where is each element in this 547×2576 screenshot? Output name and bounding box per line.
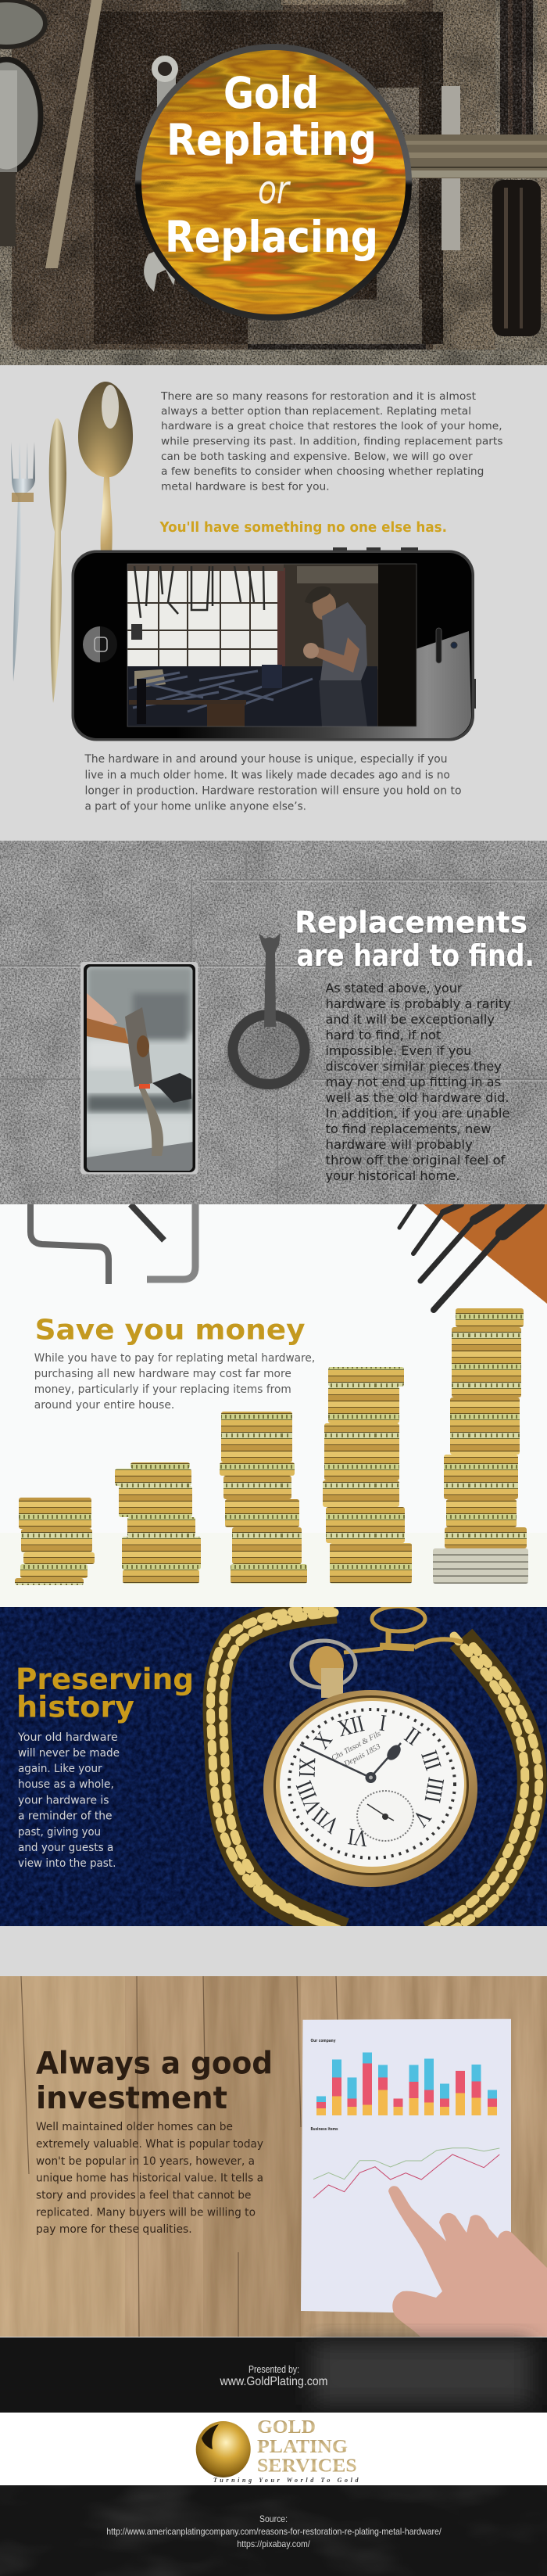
presenter text: Presented by: (248, 2364, 299, 2375)
wooden handle on the right (405, 135, 547, 336)
panel: hero workshop photo with title (0, 0, 547, 365)
section body text: Well maintained older homes can be (36, 2121, 233, 2133)
section title (36, 2047, 273, 2116)
panel: replacements are hard to find (0, 841, 547, 1204)
section body text: and it will be exceptionally (325, 1012, 495, 1027)
icon: gold globe (196, 2421, 251, 2477)
watch numerals: V (408, 1805, 436, 1832)
screwdrivers on wood (399, 1204, 547, 1310)
section body text: will never be made (18, 1747, 120, 1760)
section body text (34, 1352, 315, 1412)
phone caption paragraph: a part of your home unlike anyone else’s. (84, 801, 306, 813)
panel: logo band (0, 2413, 547, 2485)
report sheet (301, 2019, 547, 2338)
section body text: impossible. Even if you (325, 1043, 472, 1058)
watch hands (300, 1742, 403, 1783)
phone with workshop photo (72, 547, 476, 741)
intro paragraph: while preserving its past. In addition, finding replacement parts (161, 436, 503, 447)
workshop photo (127, 564, 417, 727)
title text (165, 68, 378, 262)
workbench tools (127, 666, 377, 727)
watch numerals: IIII (420, 1775, 449, 1805)
steel bar (442, 86, 460, 250)
section body text: purchasing all new hardware may cost far more (34, 1368, 291, 1380)
coin stack 4 (323, 1367, 412, 1584)
section body text: replicated. Many buyers will be willing to (36, 2207, 256, 2219)
source list: Source: (259, 2513, 288, 2524)
phone caption paragraph: The hardware in and around your house is unique, especially if you (84, 753, 447, 766)
panel: sources (0, 2485, 547, 2576)
intro paragraph: always a better option than replacement. Replating metal (161, 406, 471, 418)
watch numerals: XII (335, 1710, 366, 1742)
section body text: While you have to pay for replating metal hardware, (34, 1352, 315, 1365)
section body text: house as a whole, (18, 1778, 114, 1791)
section body text: again. Like your (18, 1763, 102, 1775)
section body text: hard to find, if not (325, 1028, 441, 1042)
section body text: well as the old hardware did. (325, 1090, 509, 1105)
intro paragraph: can be both tasking and expensive. Below, we will go over (161, 451, 473, 463)
source list (106, 2513, 442, 2549)
section body text: discover similar pieces they (325, 1059, 502, 1074)
intro paragraph: a few benefits to consider when choosing whether replating (161, 466, 484, 478)
goggles (0, 0, 45, 246)
speaker and camera (436, 628, 457, 663)
panel: presented by (0, 2337, 547, 2413)
title medallion (135, 44, 412, 321)
watch numerals: IX (294, 1756, 320, 1778)
watch numerals: VI (346, 1824, 370, 1852)
section body text: around your entire house. (34, 1399, 174, 1412)
panel: always a good investment (0, 1976, 547, 2338)
phone caption paragraph (84, 753, 461, 813)
section body text: pay more for these qualities. (36, 2223, 192, 2236)
watch numerals: II (400, 1722, 425, 1750)
wrench (144, 59, 178, 292)
presenter text (220, 2364, 328, 2388)
section body text (325, 981, 511, 1183)
icon: iron ring knocker (226, 933, 313, 1091)
panel: intro and something unique (11, 382, 503, 813)
intro paragraph (160, 391, 503, 493)
title text: or (258, 167, 291, 213)
section body text: hardware is probably a rarity (325, 996, 511, 1011)
watch numerals: X (309, 1727, 338, 1753)
phone caption paragraph: longer in production. Hardware restoration will ensure you hold on to (84, 785, 461, 798)
section title: Preserving (16, 1663, 194, 1696)
section body text: your historical home. (325, 1168, 459, 1183)
section body text: view into the past. (18, 1857, 116, 1870)
section title (16, 1663, 194, 1724)
intro paragraph: There are so many reasons for restoration and it is almost (160, 391, 476, 403)
section body text: throw off the original feel of (325, 1153, 506, 1168)
chart: coin stacks (15, 1308, 528, 1585)
section title (295, 906, 534, 973)
source list: http://www.americanplatingcompany.com/reasons-for-restoration-re-plating-metal-hardware/ (106, 2526, 442, 2537)
section body text: As stated above, your (325, 981, 463, 996)
line chart (313, 2148, 499, 2198)
section body text: your hardware is (18, 1794, 109, 1806)
home button (83, 626, 117, 662)
chart title: Our company (311, 2039, 336, 2043)
section title: investment (36, 2081, 227, 2116)
section body text: to find replacements, new (325, 1121, 492, 1136)
section body text: In addition, if you are unable (325, 1106, 509, 1121)
logo wordmark: SERVICES (257, 2456, 357, 2477)
section body text: past, giving you (18, 1826, 101, 1839)
gold chain (211, 1607, 539, 1938)
coin stack 5 (433, 1308, 528, 1584)
phone caption paragraph: live in a much older home. It was likely made decades ago and is no (84, 770, 450, 782)
section body text (17, 1731, 120, 1870)
logo wordmark (257, 2417, 357, 2477)
hammer photo frame (80, 962, 198, 1175)
intro paragraph: hardware is a great choice that restores the look of your home, (161, 421, 502, 432)
section title: Replacements (295, 906, 527, 940)
pointing hand (388, 2186, 547, 2338)
section body text: won't be popular in 10 years, however, a (36, 2155, 255, 2168)
watch numerals: I (378, 1710, 388, 1736)
watch numerals: VII (308, 1803, 344, 1839)
icon: gold cutlery (11, 382, 133, 703)
presenter text: www.GoldPlating.com (220, 2375, 328, 2388)
watch maker mark: Depuis 1853 (342, 1742, 382, 1769)
stacked bar chart (316, 2052, 497, 2115)
section body text: and your guests a (18, 1842, 113, 1854)
heading: You'll have something no one else has. (159, 520, 447, 536)
section body text: a reminder of the (18, 1810, 113, 1822)
section body text: hardware will probably (325, 1137, 473, 1152)
section title: Save you money (35, 1315, 306, 1347)
section body text: money, particularly if your replacing items from (34, 1383, 291, 1396)
panel: save you money (0, 1204, 547, 1607)
source list: https://pixabay.com/ (237, 2538, 310, 2549)
allen keys (30, 1204, 195, 1284)
section body text: story and provides a feel that cannot be (36, 2190, 251, 2202)
logo wordmark: GOLD (257, 2417, 316, 2438)
man at workbench (303, 587, 367, 727)
section title: Always a good (36, 2047, 273, 2082)
section title: history (16, 1691, 134, 1724)
section body text: may not end up fitting in as (325, 1075, 501, 1089)
stick (45, 0, 102, 268)
intro paragraph: metal hardware is best for you. (161, 482, 330, 493)
section body text: unique home has historical value. It tells a (36, 2172, 263, 2185)
title text: Gold (223, 68, 319, 118)
section body text: extremely valuable. What is popular today (36, 2138, 263, 2151)
watch numerals (291, 1710, 449, 1852)
watch sub-dial (357, 1791, 413, 1841)
logo tagline: Turning Your World To Gold (213, 2477, 359, 2484)
logo wordmark: PLATING (257, 2437, 348, 2457)
watch numerals: III (417, 1747, 446, 1774)
section body text (36, 2121, 263, 2236)
pocket watch (263, 1641, 477, 1887)
chain clasp (344, 1606, 463, 1652)
title text: Replacing (165, 212, 378, 262)
section body text: Your old hardware (17, 1731, 118, 1744)
coin stack 1 (15, 1498, 95, 1585)
watch maker mark: Chs Tissot & Fils (330, 1730, 382, 1763)
panel: preserving history (0, 1606, 547, 1938)
watch numerals: VIII (291, 1778, 327, 1817)
chart title: Business items (311, 2127, 338, 2132)
coin stack 3 (220, 1412, 307, 1584)
coin stack 2 (115, 1462, 201, 1584)
title text: Replating (166, 115, 377, 165)
